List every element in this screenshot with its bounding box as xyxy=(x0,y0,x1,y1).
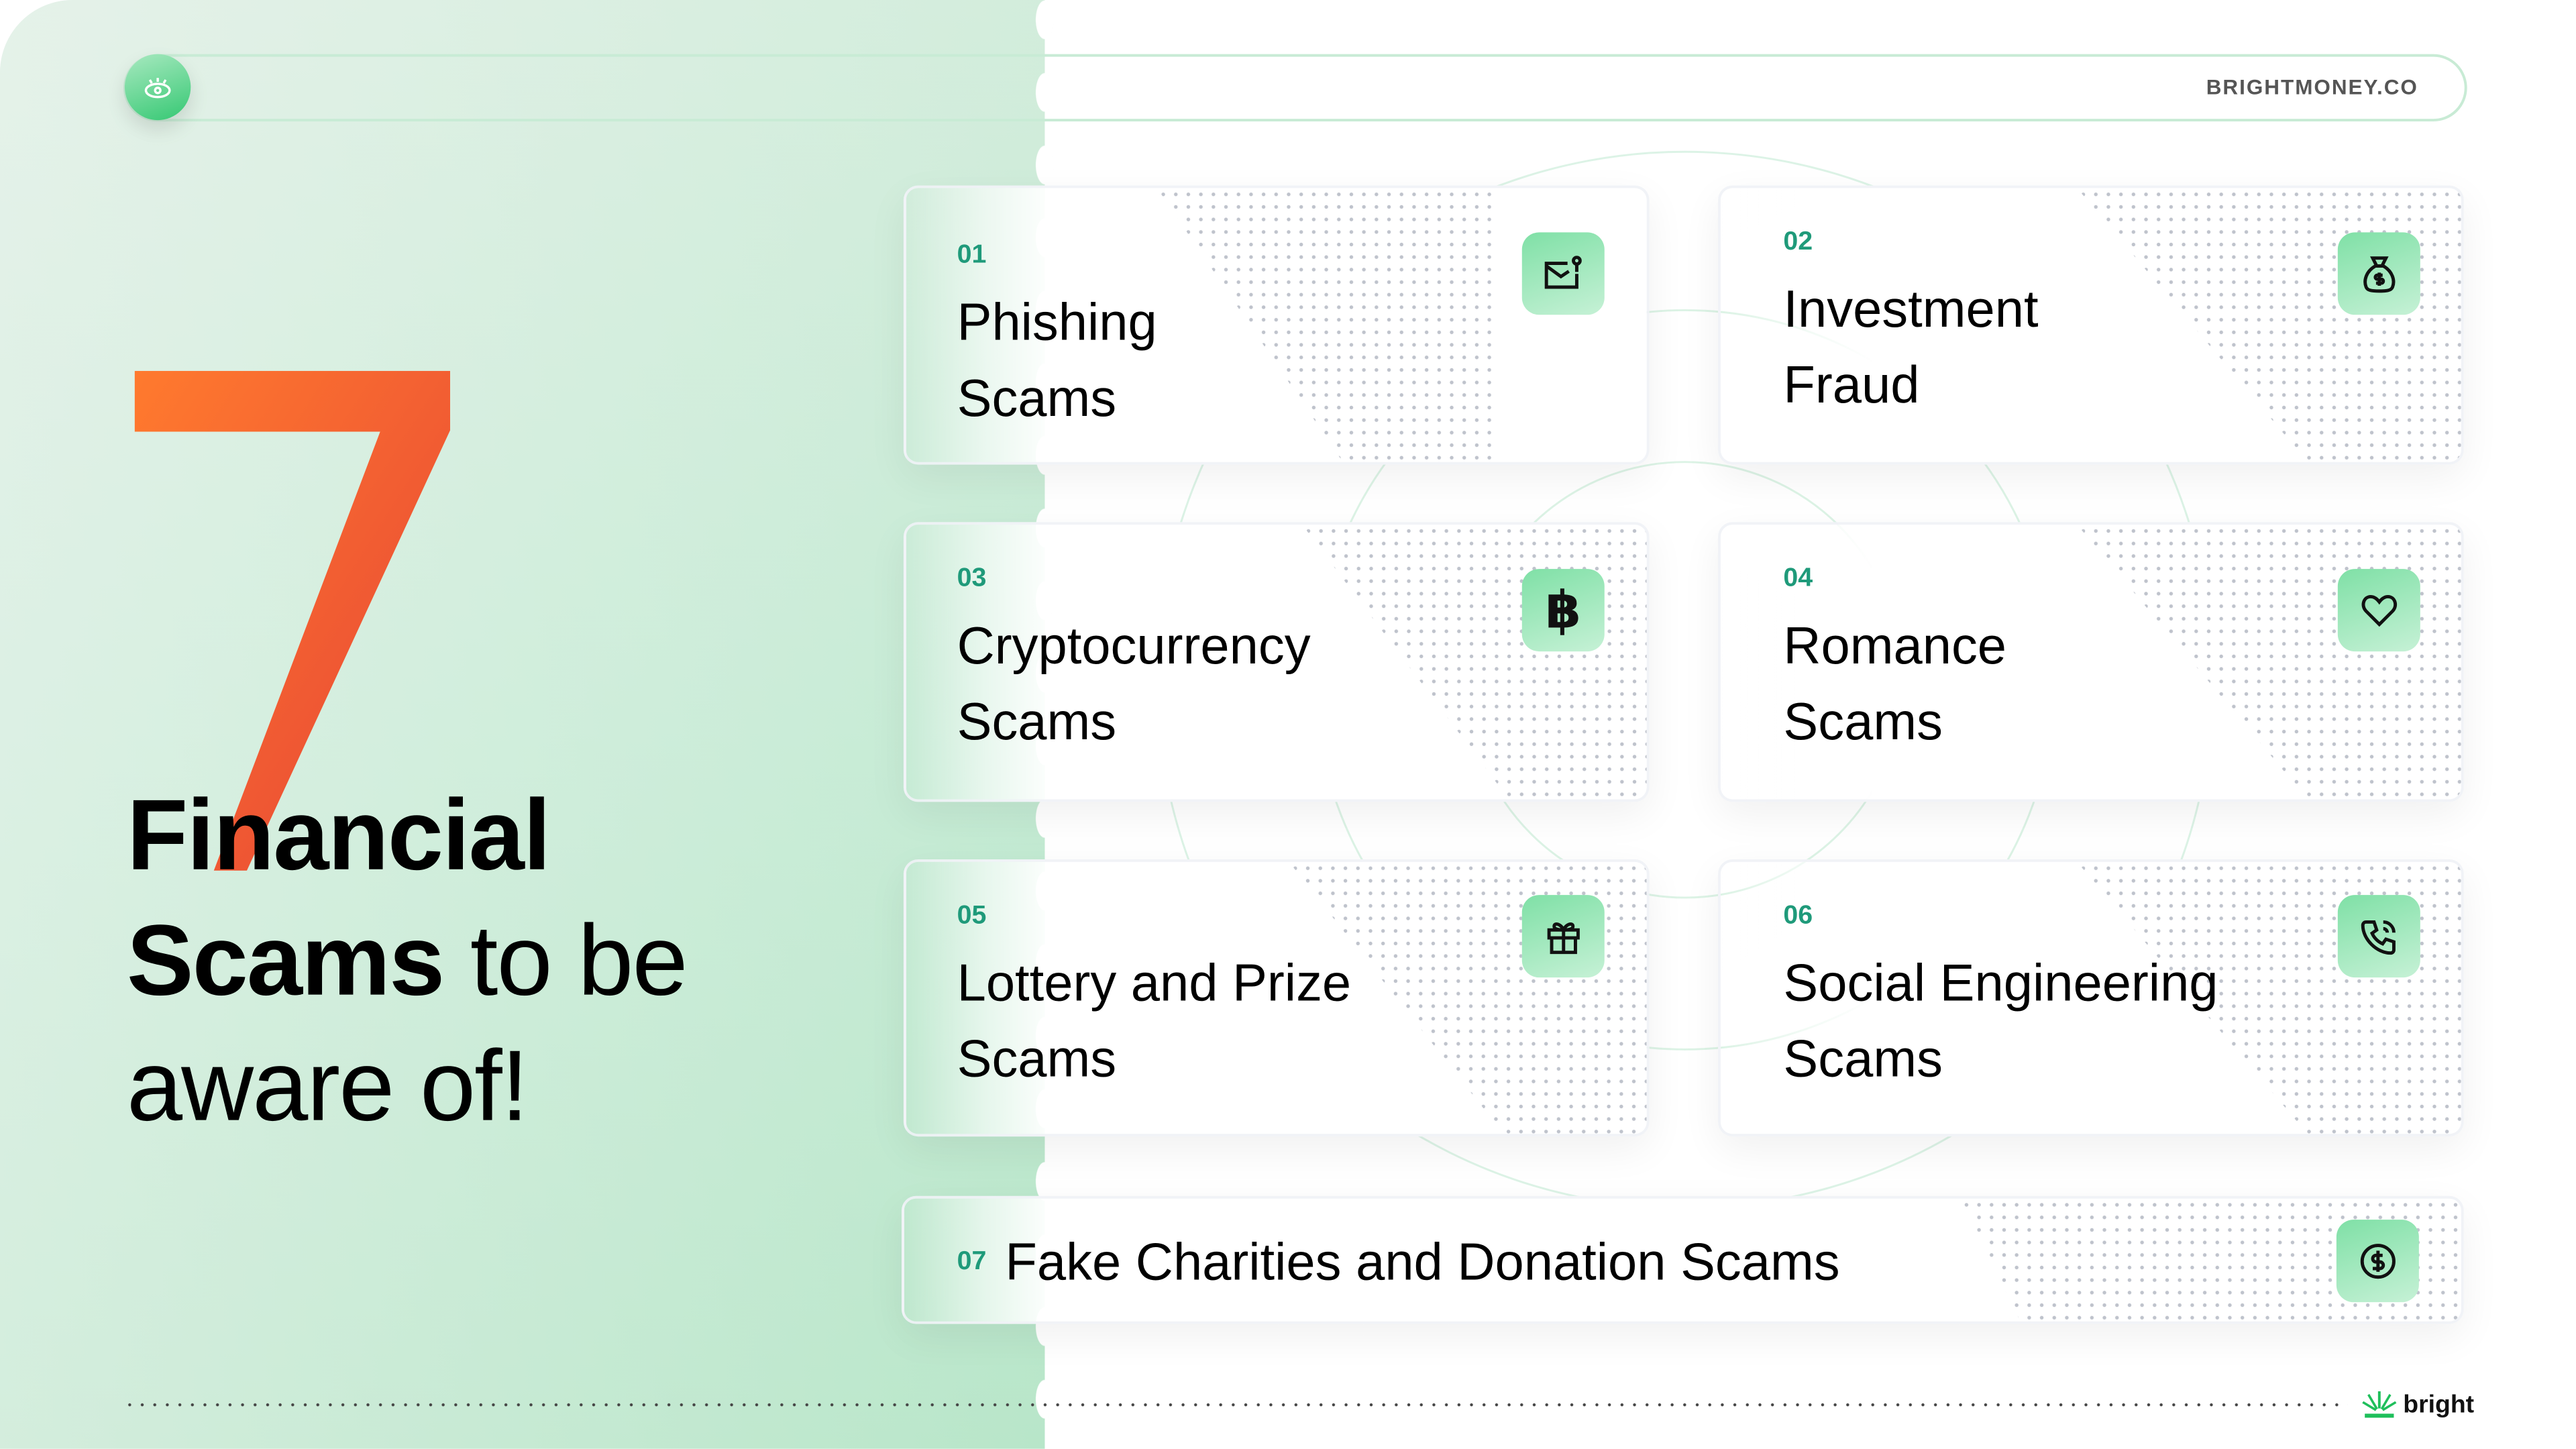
card 03 xyxy=(904,522,1650,802)
card 07: Fake Charities and Donation Scams xyxy=(1005,1232,1840,1291)
card 06: 06 xyxy=(1783,900,1813,929)
card 06: Social Engineering xyxy=(1783,953,2218,1012)
dotted footer line xyxy=(123,1403,2348,1407)
title xyxy=(127,779,687,1142)
card 02: 02 xyxy=(1783,226,1813,256)
card 06: Scams xyxy=(1783,1029,1943,1087)
card 03: 03 xyxy=(957,563,986,592)
icon: gift xyxy=(1522,895,1605,977)
scalloped edge xyxy=(1035,0,1055,1449)
icon: mail hook xyxy=(1522,232,1605,315)
card 04: Scams xyxy=(1783,692,1943,751)
card 01 xyxy=(904,185,1650,465)
card 04: 04 xyxy=(1783,563,1813,592)
card 05: Scams xyxy=(957,1029,1116,1087)
icon: phone xyxy=(2338,895,2420,977)
card 01: Phishing xyxy=(957,292,1157,351)
card 07: 07 xyxy=(957,1246,986,1275)
card 01: 01 xyxy=(957,239,986,268)
brand url: BRIGHTMONEY.CO xyxy=(2206,75,2418,99)
background circles xyxy=(1170,150,2200,1196)
card 01: Scams xyxy=(957,368,1116,427)
icon: bitcoin xyxy=(1522,569,1605,651)
card 02 xyxy=(1718,185,2464,465)
card 05 xyxy=(904,859,1650,1136)
brand logo xyxy=(2362,1391,2474,1418)
brand logo: bright xyxy=(2403,1391,2474,1418)
card 02: Investment xyxy=(1783,279,2039,338)
card 07 xyxy=(902,1196,2464,1324)
big number 7 xyxy=(134,370,450,871)
card 03: Cryptocurrency xyxy=(957,616,1311,675)
title: aware of! xyxy=(127,1030,527,1142)
icon: bitcoin: ฿ xyxy=(1546,580,1581,640)
card 03: Scams xyxy=(957,692,1116,751)
title: Scams to be xyxy=(127,904,687,1016)
title: Financial xyxy=(127,779,549,891)
card 02: Fraud xyxy=(1783,355,1919,414)
green left panel xyxy=(0,0,1044,1449)
icon: dollar coin xyxy=(2337,1220,2419,1302)
card 05: 05 xyxy=(957,900,986,929)
icon: eye xyxy=(125,54,191,120)
header bar xyxy=(123,54,2467,121)
icon: money bag xyxy=(2338,232,2420,315)
card 05: Lottery and Prize xyxy=(957,953,1351,1012)
card 04 xyxy=(1718,522,2464,802)
card 06 xyxy=(1718,859,2464,1136)
card 04: Romance xyxy=(1783,616,2006,675)
icon: heart xyxy=(2338,569,2420,651)
